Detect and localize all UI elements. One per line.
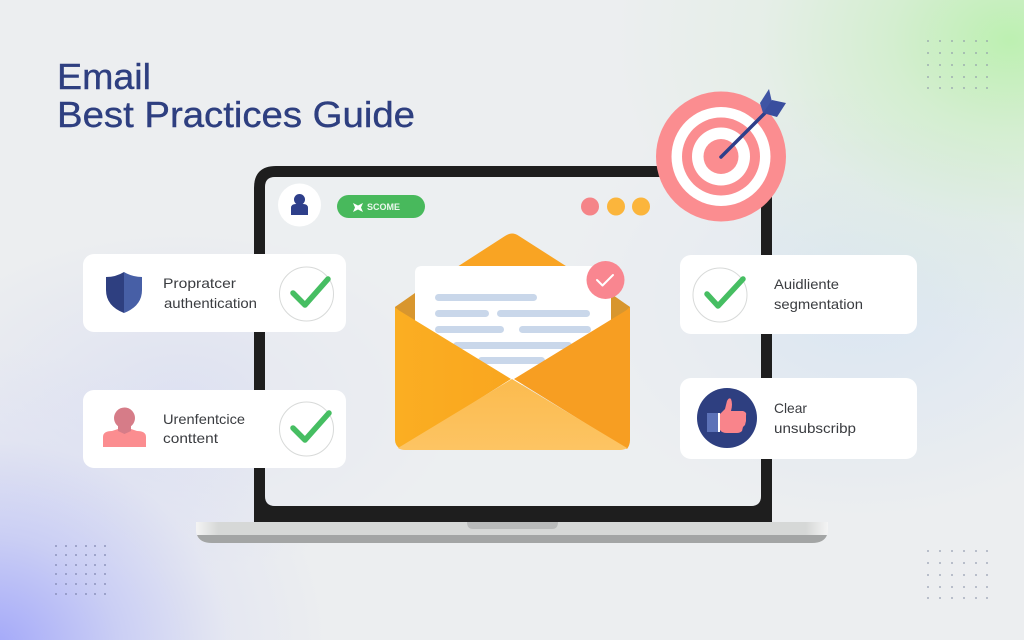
icon: target with arrow	[656, 89, 786, 222]
laptop screen	[265, 177, 761, 506]
card text: authentication	[164, 295, 257, 311]
title: Best Practices Guide	[57, 94, 415, 135]
laptop	[196, 166, 828, 543]
card: relevant content	[83, 390, 346, 468]
card text: Urenfentcice	[163, 411, 245, 427]
card text: Clear	[774, 400, 807, 416]
card: audience segmentation	[680, 255, 917, 334]
card text: Propratcer	[163, 275, 236, 291]
screen header: window dots	[581, 198, 650, 216]
card text	[163, 411, 245, 446]
envelope right fold	[514, 308, 630, 449]
envelope left fold	[395, 308, 511, 449]
icon: shield	[106, 272, 142, 313]
icon: check	[280, 267, 334, 321]
laptop base	[196, 522, 828, 543]
title	[57, 56, 415, 135]
card: proper authentication	[83, 254, 346, 332]
email letter	[415, 266, 611, 385]
icon: thumbs up	[697, 388, 757, 448]
card text	[774, 276, 863, 312]
envelope	[395, 234, 630, 450]
title: Email	[57, 56, 151, 97]
dot grid: top right	[927, 40, 988, 89]
screen header: status pill	[337, 195, 425, 218]
dot grid: bottom left	[55, 545, 106, 595]
icon: check	[693, 268, 747, 322]
card text: segmentation	[774, 296, 863, 312]
card text	[774, 400, 856, 436]
card text: conttent	[163, 430, 218, 446]
dot grid: bottom right	[927, 550, 988, 599]
card text: Auidliente	[774, 276, 839, 292]
screen header: avatar	[278, 184, 321, 226]
email check badge	[586, 261, 624, 299]
envelope back flap	[395, 234, 630, 380]
icon: person	[103, 408, 146, 447]
envelope bottom fold	[398, 379, 627, 450]
icon: check	[280, 402, 334, 456]
screen header: status pill: SCOME	[367, 202, 400, 212]
card text	[163, 275, 257, 311]
laptop screen bezel	[254, 166, 772, 522]
card text: unsubscribp	[774, 420, 856, 436]
card: clear unsubscribe	[680, 378, 917, 459]
